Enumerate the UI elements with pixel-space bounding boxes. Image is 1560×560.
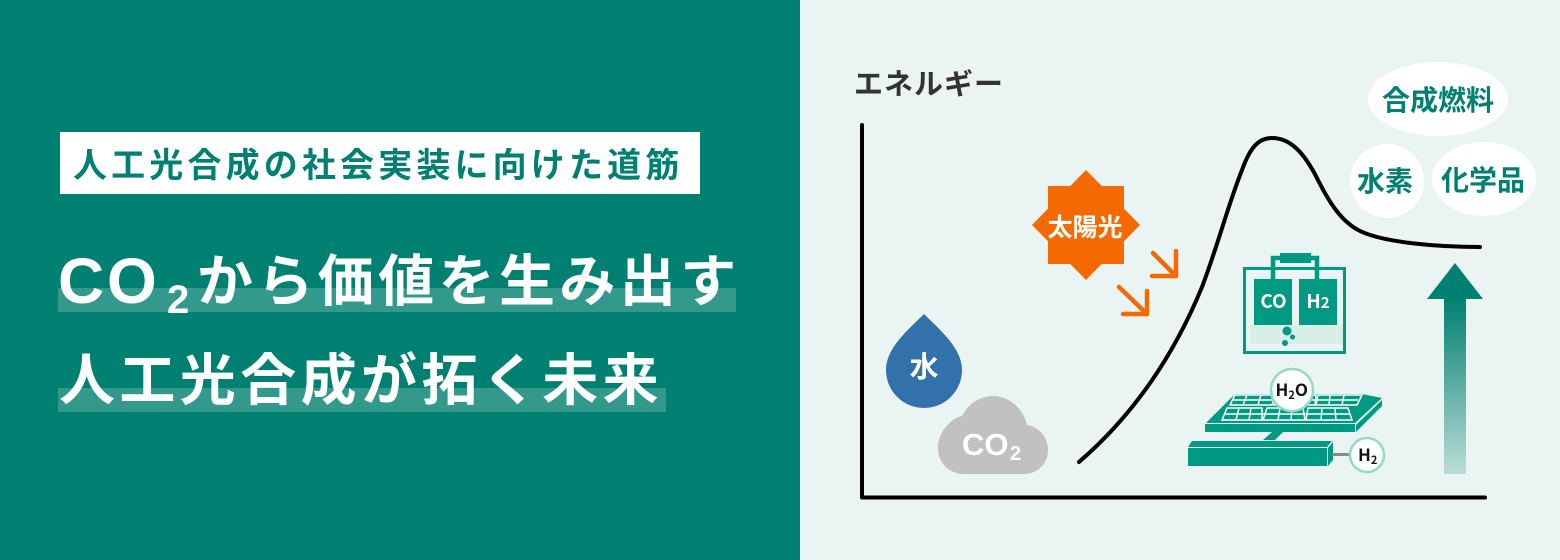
label: H2 bbox=[1350, 438, 1384, 472]
bubble: synthetic fuel: 合成燃料 bbox=[1382, 85, 1494, 116]
arrow: sunlight upper bbox=[1152, 251, 1176, 276]
bubble: chemicals bbox=[1432, 142, 1536, 216]
bubble: synthetic fuel bbox=[1368, 62, 1508, 136]
title line 1: 2 bbox=[167, 278, 189, 322]
icon: sunlight: 太陽光 bbox=[1047, 214, 1123, 242]
icon: solar panel device bbox=[1188, 394, 1382, 466]
label: H2: H bbox=[1358, 441, 1371, 466]
bubble: hydrogen bbox=[1350, 144, 1424, 218]
subtitle tag bbox=[60, 132, 700, 194]
icon: water drop: 水 bbox=[909, 351, 939, 384]
icon: electrolysis reactor: H2 bbox=[1306, 287, 1330, 314]
icon: CO2 cloud: CO bbox=[962, 427, 1008, 462]
title line 2: 人工光合成が拓く未来 bbox=[59, 349, 663, 412]
icon: water drop bbox=[886, 314, 962, 408]
chart axes bbox=[862, 125, 1485, 498]
label: H2O: H bbox=[1276, 376, 1288, 401]
axis label: エネルギー bbox=[854, 68, 1004, 101]
icon: electrolysis reactor: CO bbox=[1260, 287, 1287, 314]
label: H2O: O bbox=[1295, 376, 1308, 401]
subtitle tag: 人工光合成の社会実装に向けた道筋 bbox=[73, 147, 683, 185]
title line 1 bbox=[58, 245, 741, 322]
arrow: energy up bbox=[1427, 263, 1483, 474]
panel: right pale background bbox=[800, 0, 1560, 560]
panel: left green background bbox=[0, 0, 800, 560]
highlight bar: line 2 bbox=[58, 388, 666, 412]
connector: H2 line bbox=[1332, 453, 1352, 456]
bubble: chemicals: 化学品 bbox=[1441, 165, 1525, 196]
icon: CO2 cloud: 2 bbox=[1010, 443, 1021, 465]
title line 1: C bbox=[58, 245, 104, 317]
icon: electrolysis reactor bbox=[1244, 253, 1344, 352]
title line 1: O bbox=[107, 245, 157, 317]
energy curve bbox=[1079, 138, 1480, 462]
icon: sunlight bbox=[1032, 170, 1140, 280]
bubble: hydrogen: 水素 bbox=[1357, 166, 1413, 197]
label: H2: 2 bbox=[1371, 452, 1377, 468]
arrow: sunlight lower bbox=[1119, 287, 1147, 314]
title line 1: から価値を生み出す bbox=[197, 250, 741, 313]
label: H2O bbox=[1271, 369, 1313, 411]
highlight bar: line 1 bbox=[58, 288, 736, 312]
icon: CO2 cloud bbox=[938, 396, 1048, 474]
label: H2O: 2 bbox=[1288, 387, 1295, 403]
